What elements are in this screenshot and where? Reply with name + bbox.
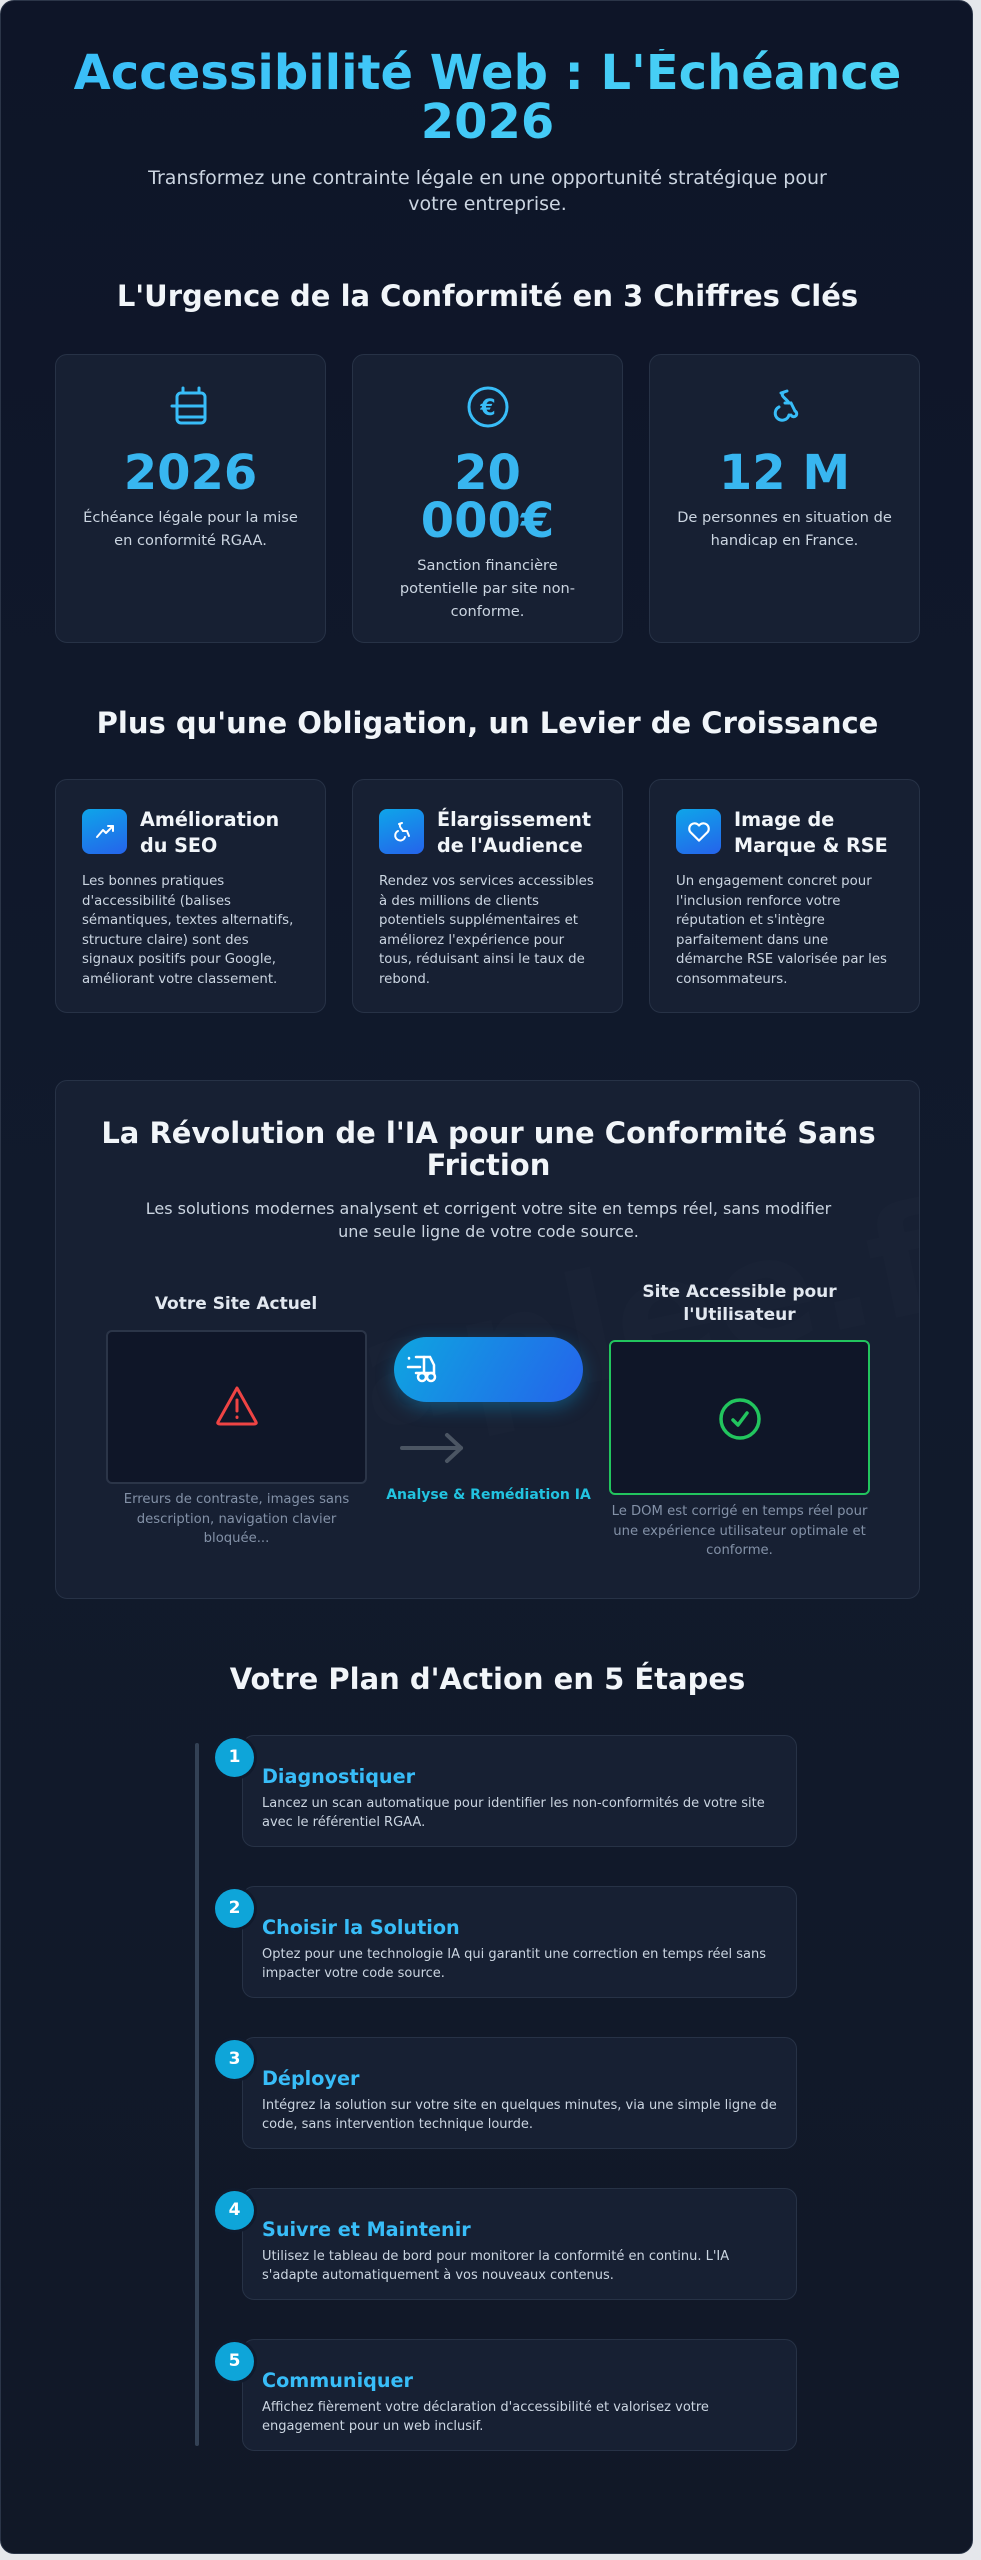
stat card: 2026	[55, 354, 326, 643]
text: current site issues: Erreurs de contraste, images sans description, navigation clavier bloquée...	[124, 1492, 349, 1546]
title: 2026	[421, 94, 554, 150]
step 3 badge: 3	[229, 2049, 240, 2069]
panel title	[101, 1116, 876, 1182]
benefit card: brand	[649, 779, 920, 1013]
step 5 badge: 5	[229, 2351, 240, 2371]
panel: AI revolution	[55, 1080, 920, 1599]
step 1 badge	[215, 1738, 254, 1777]
step 4	[242, 2188, 797, 2300]
box: accessible site with check	[609, 1340, 870, 1495]
icon: check circle	[719, 1398, 761, 1440]
stat card: 12 M: De personnes en situation de handicap en France.	[677, 509, 892, 549]
step 2 badge: 2	[229, 1898, 240, 1918]
stat card: 12 M	[649, 354, 920, 643]
panel subtitle: Les solutions modernes analysent et corrigent votre site en temps réel, sans modifier	[146, 1199, 831, 1218]
benefit card: SEO: Amélioration du SEO	[140, 808, 279, 857]
step 1: Diagnostiquer	[262, 1765, 415, 1788]
step 2 badge	[215, 1889, 254, 1928]
panel title: Friction	[427, 1148, 550, 1182]
text: accessible site result: Le DOM est corrigé en temps réel pour une expérience utilisateur optimale et conforme.	[612, 1504, 867, 1558]
label: accessible site: Site Accessible pour l'Utilisateur	[642, 1282, 837, 1325]
benefit card: SEO: Les bonnes pratiques d'accessibilité (balises sémantiques, textes alternatifs, structure claire) sont des signaux positifs pour Google, améliorant votre classement.	[82, 874, 293, 986]
icon: accessibility	[379, 809, 424, 854]
icon: accessibility glyph	[406, 1356, 436, 1382]
title	[1, 49, 974, 147]
stat card: 2026: Échéance légale pour la mise en conformité RGAA.	[83, 509, 298, 549]
benefit card: audience: Rendez vos services accessibles à des millions de clients potentiels supplémentaires et améliorez l'expérience pour tous, réduisant ainsi le taux de rebond.	[379, 874, 594, 986]
step 5 badge	[215, 2342, 254, 2381]
step 2	[242, 1886, 797, 1998]
icon: warning	[216, 1386, 258, 1426]
step 2: Optez pour une technologie IA qui garantit une correction en temps réel sans impacter votre code source.	[262, 1947, 766, 1981]
panel subtitle	[146, 1199, 832, 1241]
stat card: 20 000€: 20	[454, 445, 521, 501]
icon: heart	[676, 809, 721, 854]
stat card: 12 M: 12 M	[719, 445, 850, 501]
heading: action plan: Votre Plan d'Action en 5 Étapes	[230, 1662, 745, 1696]
icon: wheelchair	[774, 390, 798, 422]
step 4 badge: 4	[229, 2200, 240, 2220]
step 2: Choisir la Solution	[262, 1916, 460, 1939]
step 1	[242, 1735, 797, 1847]
step 3	[242, 2037, 797, 2149]
benefit card: brand: Image de Marque & RSE	[734, 808, 888, 857]
icon: calendar	[170, 386, 206, 424]
box: current site with warning	[106, 1330, 367, 1484]
step 5: Communiquer	[262, 2369, 413, 2392]
title: Accessibilité Web : L'Échéance	[74, 45, 901, 101]
stat card: 20 000€: Sanction financière potentielle par site non-conforme.	[400, 557, 575, 620]
step 5	[242, 2339, 797, 2451]
arrow	[400, 1433, 463, 1464]
subtitle: Transformez une contrainte légale en une opportunité stratégique pour votre entreprise.	[148, 167, 827, 215]
step 4: Utilisez le tableau de bord pour monitorer la conformité en continu. L'IA s'adapte automatiquement à vos nouveaux contenus.	[262, 2249, 729, 2283]
step 5: Affichez fièrement votre déclaration d'accessibilité et valorisez votre engagement pour un web inclusif.	[262, 2400, 709, 2434]
label: AI remediation: Analyse & Remédiation IA	[386, 1487, 591, 1503]
benefit card: audience	[352, 779, 623, 1013]
heading: key figures: L'Urgence de la Conformité en 3 Chiffres Clés	[117, 279, 858, 313]
step 1: Lancez un scan automatique pour identifier les non-conformités de votre site avec le référentiel RGAA.	[262, 1796, 765, 1830]
step 3 badge	[215, 2040, 254, 2079]
label: current site: Votre Site Actuel	[155, 1294, 317, 1314]
heading: benefits: Plus qu'une Obligation, un Levier de Croissance	[97, 706, 878, 740]
step 1 badge: 1	[229, 1747, 240, 1767]
pill: AI engine	[394, 1337, 583, 1402]
benefit card: brand: Un engagement concret pour l'inclusion renforce votre réputation et s'intègre parfaitement dans une démarche RSE valorisée par les consommateurs.	[676, 874, 887, 986]
step 4: Suivre et Maintenir	[262, 2218, 471, 2241]
icon: euro	[468, 386, 508, 428]
step 4 badge	[215, 2191, 254, 2230]
benefit card: SEO	[55, 779, 326, 1013]
step 3: Déployer	[262, 2067, 359, 2090]
panel subtitle: une seule ligne de votre code source.	[338, 1222, 639, 1241]
step 3: Intégrez la solution sur votre site en quelques minutes, via une simple ligne de code, sans intervention technique lourde.	[262, 2098, 777, 2132]
stat card: 20 000€	[352, 354, 623, 643]
stat card: 2026: 2026	[124, 445, 257, 501]
panel title: La Révolution de l'IA pour une Conformité Sans	[101, 1116, 876, 1150]
icon: euro: €	[479, 396, 495, 421]
icon: trend	[82, 809, 127, 854]
benefit card: audience: Élargissement de l'Audience	[437, 808, 591, 857]
timeline line	[195, 1743, 199, 2446]
stat card: 20 000€: 000€	[421, 493, 554, 549]
